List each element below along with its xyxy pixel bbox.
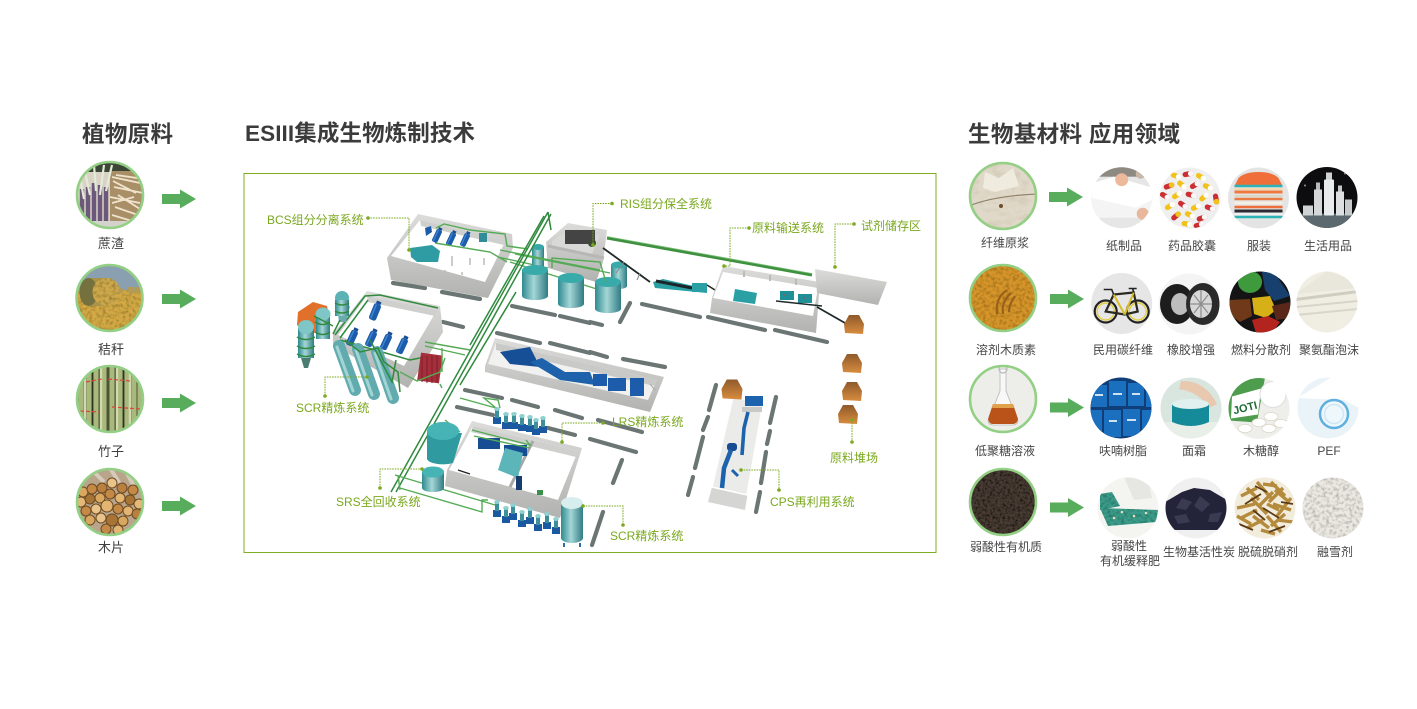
label: 溶剂木质素 <box>976 342 1036 357</box>
photo: deicer granules <box>1302 477 1364 539</box>
label: 药品胶囊 <box>1168 238 1216 253</box>
leader: SCR upper <box>296 375 369 415</box>
label: 聚氨酯泡沫 <box>1299 343 1359 357</box>
row: weak acid organic matter products <box>969 468 1364 568</box>
heading: bio-based materials and applications: 生物基材料 应用领域 <box>968 121 1180 147</box>
building: BCS component separation <box>387 214 600 298</box>
photo: face cream <box>1160 377 1222 440</box>
photo: pigments <box>1229 271 1291 333</box>
label: 纤维原浆 <box>981 235 1029 250</box>
tanks near RIS <box>500 244 627 313</box>
label: SCR精炼系统 <box>296 400 369 415</box>
photo: paper <box>1091 167 1153 229</box>
building: SCR refining <box>333 291 443 388</box>
photo: carbon fibre bike <box>1091 272 1153 334</box>
photo: humic matter <box>969 468 1037 536</box>
label: SRS全回收系统 <box>336 494 421 509</box>
arrow <box>162 190 196 208</box>
photo: desulfurization sticks <box>1234 477 1296 539</box>
leader: CPS <box>739 468 855 509</box>
arrow <box>1049 188 1083 206</box>
label: 民用碳纤维 <box>1093 343 1153 357</box>
photo: flask <box>969 365 1037 433</box>
label: 橡胶增强 <box>1167 342 1215 357</box>
panel: biorefinery plant <box>244 174 936 552</box>
row: oligosaccharide solution products <box>969 365 1359 458</box>
building: LRS and SRS process hall <box>445 421 582 518</box>
leader: raw material conveying <box>722 220 824 268</box>
photo: fertilizer granules <box>1097 477 1159 539</box>
raw material piles <box>817 307 864 424</box>
arrow <box>162 290 196 308</box>
label: 试剂储存区 <box>861 218 921 233</box>
label: two lines <box>1100 538 1160 568</box>
leader: RIS <box>591 196 712 247</box>
label: BCS组分分离系统 <box>267 212 364 227</box>
leader: SRS <box>336 467 424 509</box>
reagent storage area <box>815 269 887 305</box>
photo: bagasse <box>76 161 144 229</box>
label: 生物基活性炭 <box>1163 545 1235 559</box>
photo: activated carbon <box>1165 477 1227 539</box>
pump row: lower <box>493 500 560 534</box>
label: PEF <box>1317 444 1341 458</box>
photo: xylitol <box>1228 378 1290 440</box>
photo: clothing <box>1228 167 1290 229</box>
arrow <box>1050 498 1084 517</box>
main pipes <box>391 212 812 512</box>
conveyor and raw material feeder <box>603 248 715 293</box>
photo: PEF bottle <box>1297 377 1359 439</box>
label: 燃料分散剂 <box>1231 342 1291 357</box>
leader: raw material yard <box>830 418 878 465</box>
photo: xylitol: JOTI <box>1232 400 1259 417</box>
row: solvent lignin products <box>969 264 1359 357</box>
label: 竹子 <box>98 444 124 459</box>
label: 脱硫脱硝剂 <box>1238 544 1298 559</box>
tall tank <box>561 497 583 547</box>
arrow <box>162 496 196 516</box>
photo: wood logs <box>76 468 144 536</box>
pump row: upper <box>493 407 547 435</box>
leader: LRS <box>560 414 683 444</box>
arrow <box>1050 290 1084 308</box>
panel border <box>244 174 936 552</box>
label: 木片 <box>98 540 124 555</box>
heading: ESIII integrated biorefinery technology: ESIII集成生物炼制技术 <box>245 121 475 146</box>
photo: tyres <box>1158 273 1220 335</box>
photo: cellulose pulp <box>969 162 1037 230</box>
label: CPS再利用系统 <box>770 495 855 509</box>
arrow <box>1050 398 1084 417</box>
label: 木糖醇 <box>1243 443 1279 458</box>
photo: PU foam <box>1296 271 1358 333</box>
label: 低聚糖溶液 <box>975 443 1035 458</box>
building: raw material conveying <box>710 266 822 333</box>
label: 秸秆 <box>98 342 124 357</box>
label: 弱酸性有机质 <box>970 539 1042 554</box>
photo: lignin powder <box>969 264 1037 332</box>
label: 原料堆场 <box>830 451 878 465</box>
towers: SCR orange unit and columns <box>297 291 470 399</box>
leader: BCS <box>267 212 411 252</box>
photo: furan resin drums <box>1090 378 1152 438</box>
photo: daily products <box>1296 166 1358 230</box>
label: 蔗渣 <box>98 236 124 251</box>
photo: bamboo <box>76 365 144 433</box>
leader: SCR lower <box>581 504 683 543</box>
building: LRS refining long hall <box>485 338 664 412</box>
label: 生活用品 <box>1304 239 1352 253</box>
label: 面霜 <box>1182 444 1206 458</box>
ground pads <box>393 283 827 545</box>
photo: straw bale <box>76 264 144 332</box>
label: SCR精炼系统 <box>610 528 683 543</box>
label: two lines: 有机缓释肥 <box>1100 554 1160 568</box>
building: CPS reuse <box>708 380 763 510</box>
label: 服装 <box>1247 239 1271 253</box>
column: plant feedstocks <box>76 161 196 555</box>
building: RIS component preservation <box>546 223 607 282</box>
photo: capsules <box>1159 167 1221 229</box>
label: 呋喃树脂 <box>1099 443 1147 458</box>
tanks: SRS recovery <box>422 422 462 492</box>
row: cellulose pulp products <box>969 162 1358 253</box>
leader: reagent storage <box>833 218 921 269</box>
label: two lines: 弱酸性 <box>1111 538 1147 553</box>
label: 纸制品 <box>1106 239 1142 253</box>
label: RIS组分保全系统 <box>620 196 712 211</box>
heading: plant feedstock: 植物原料 <box>82 122 173 147</box>
label: 融雪剂 <box>1317 544 1353 559</box>
arrow <box>162 394 196 412</box>
label: LRS精炼系统 <box>612 414 683 429</box>
label: 原料输送系统 <box>752 220 824 235</box>
